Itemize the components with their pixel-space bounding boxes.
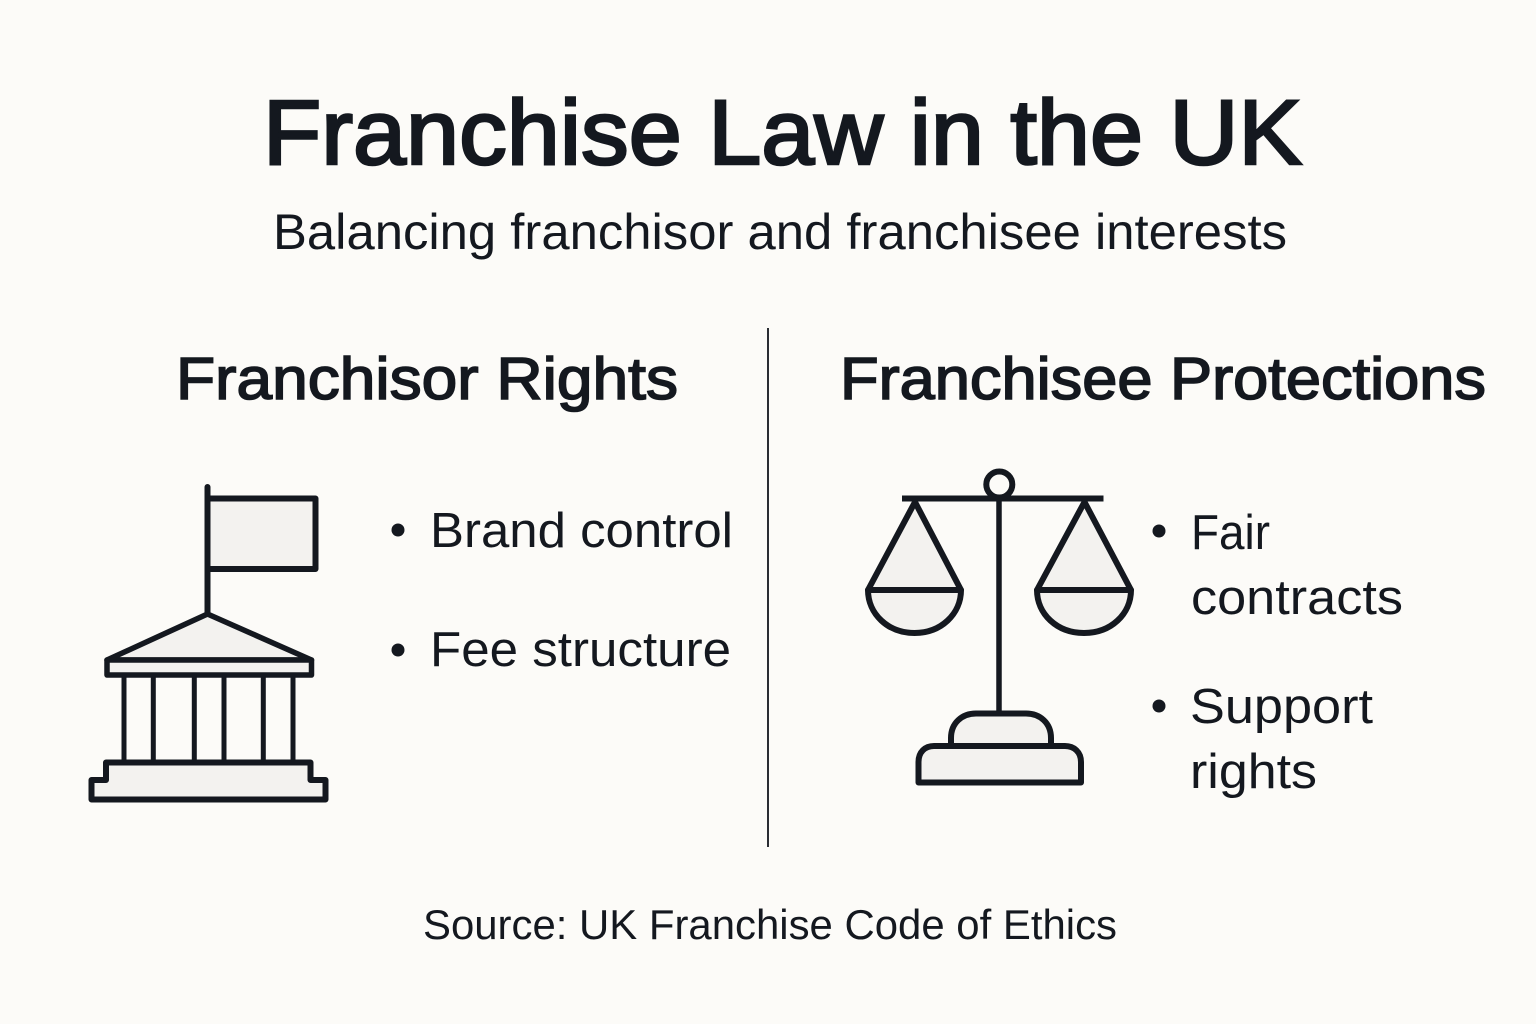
title: Franchise Law in the UK <box>263 82 1302 184</box>
bullet: support rights: Support <box>1190 680 1373 734</box>
bullet: fair contracts <box>1152 506 1403 625</box>
bullet list: franchisor rights <box>392 504 733 677</box>
panel: franchisor rights <box>92 346 733 800</box>
bullet: support rights: rights <box>1190 745 1317 799</box>
panel: franchisee protections <box>840 346 1486 799</box>
source note: Source: UK Franchise Code of Ethics <box>423 901 1117 948</box>
subtitle: Balancing franchisor and franchisee interests <box>273 204 1287 260</box>
icon: scales of justice <box>868 472 1131 782</box>
bullet: fee structure: Fee structure <box>430 623 731 677</box>
bullet: fair contracts: contracts <box>1191 571 1403 625</box>
icon: building with flag <box>92 487 326 800</box>
bullet list: franchisee protections <box>1152 506 1403 799</box>
heading: franchisee protections: Franchisee Protections <box>840 346 1486 412</box>
bullet: fair contracts: Fair <box>1191 506 1270 560</box>
bullet: support rights <box>1152 680 1373 799</box>
bullet: brand control: Brand control <box>430 504 733 558</box>
heading: franchisor rights: Franchisor Rights <box>176 346 678 412</box>
divider <box>767 328 769 847</box>
